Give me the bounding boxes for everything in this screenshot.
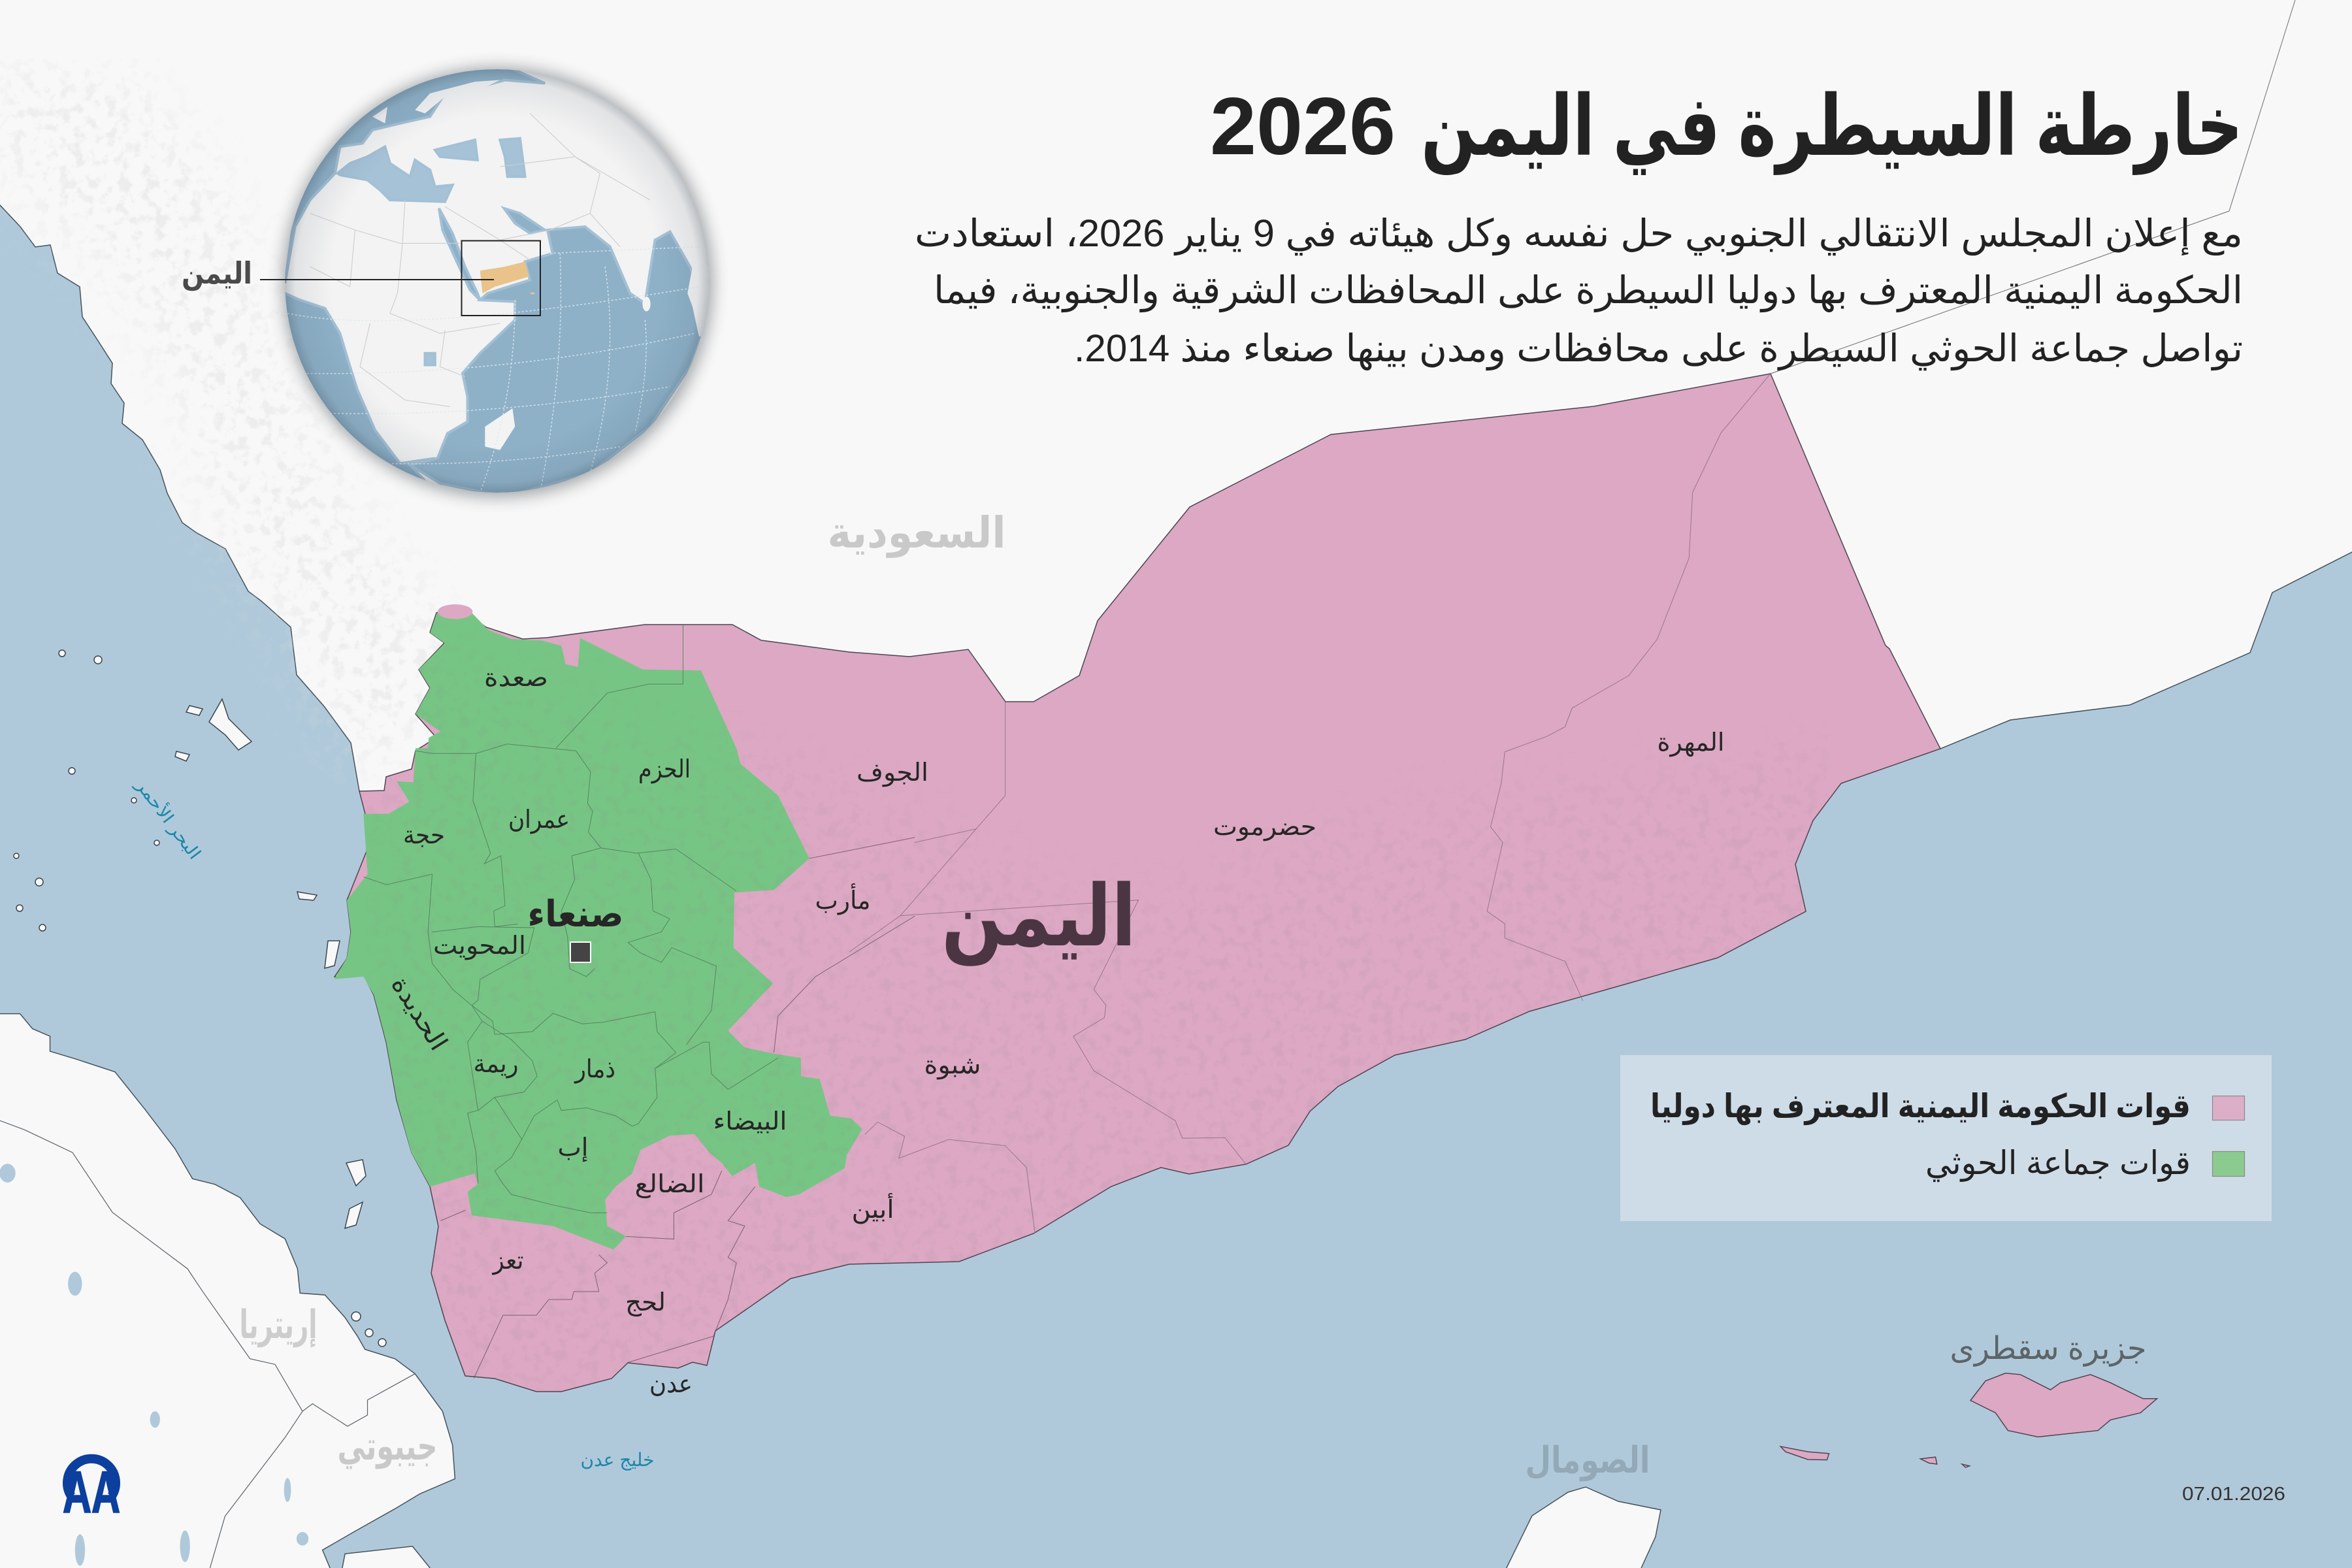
intro text: الحكومة اليمنية المعترف بها دوليا السيطرة على المحافظات الشرقية والجنوبية، فيما	[934, 269, 2243, 313]
province labels: عمران	[508, 806, 570, 834]
label: Yemen: اليمن	[182, 256, 252, 291]
land: Somalia coast	[1500, 1487, 1661, 1568]
province labels: الجوف	[857, 759, 928, 787]
province borders in the east	[849, 374, 1771, 1233]
borders: Eritrea, Ethiopia, Djibouti	[0, 1120, 415, 1568]
logo: Anadolu Agency: AA	[63, 1460, 120, 1526]
province labels: أبين	[852, 1193, 894, 1224]
province labels: صعدة	[484, 664, 548, 692]
locator box	[461, 240, 540, 316]
globe oceans	[280, 63, 709, 497]
province labels: حجة	[403, 822, 445, 849]
intro text	[915, 212, 2243, 371]
country labels: السعودية	[827, 508, 1006, 559]
land: Horn of Africa	[0, 1014, 455, 1568]
globe locator	[182, 63, 713, 497]
legend swatch: government	[2212, 1096, 2245, 1120]
province labels: ذمار	[574, 1056, 615, 1083]
legend	[1620, 1055, 2272, 1221]
capital: Sanaa: صنعاء	[528, 893, 623, 934]
province labels: الحديدة	[385, 972, 452, 1056]
province borders in the south-west	[440, 838, 915, 1379]
label: Socotra island: جزيرة سقطرى	[1950, 1331, 2147, 1367]
globe graticule	[287, 247, 700, 493]
globe land details	[372, 80, 710, 450]
Yemen: government controlled area	[335, 374, 1940, 1392]
pink enclave at the northern tip	[438, 604, 472, 619]
title: 2026	[1210, 82, 1396, 172]
Houthi controlled area	[335, 604, 915, 1379]
intro text: مع إعلان المجلس الانتقالي الجنوبي حل نفسه وكل هيئاته في 9 يناير 2026، استعادت	[915, 212, 2243, 256]
lakes	[0, 1164, 308, 1566]
legend panel	[1620, 1055, 2272, 1221]
province labels: لحج	[625, 1289, 666, 1317]
globe country borders	[310, 113, 650, 406]
country labels: إريتريا	[239, 1303, 318, 1348]
province labels: ريمة	[473, 1051, 519, 1078]
country labels: اليمن	[941, 868, 1136, 966]
capital: Sanaa	[528, 893, 623, 962]
terrain: western mountains	[0, 59, 470, 784]
globe shadow	[283, 67, 713, 497]
country labels: جيبوتي	[337, 1424, 438, 1469]
province labels: المهرة	[1657, 729, 1725, 757]
province labels: المحويت	[433, 932, 526, 960]
land: Arabian peninsula	[0, 0, 2352, 980]
Socotra and nearby islands	[1780, 1373, 2157, 1467]
date: 07.01.2026	[2182, 1484, 2285, 1505]
province labels: تعز	[492, 1247, 524, 1275]
leader line	[260, 279, 494, 280]
islands: Red Sea	[14, 650, 386, 1347]
province labels	[385, 664, 1725, 1398]
province labels: الحزم	[638, 756, 691, 784]
Yemen on globe	[480, 262, 529, 293]
country labels	[239, 508, 1650, 1482]
sea labels: البحر الأحمر	[131, 774, 206, 864]
line: Saudi-Oman border	[1771, 0, 2295, 374]
legend swatch: Houthi	[2212, 1151, 2245, 1176]
sea labels	[131, 774, 655, 1471]
logo: Anadolu Agency	[63, 1459, 120, 1526]
country labels: الصومال	[1525, 1439, 1650, 1482]
intro text: تواصل جماعة الحوثي السيطرة على محافظات ومدن بينها صنعاء منذ 2014.	[1074, 327, 2243, 371]
Yemen terrain texture	[366, 621, 1829, 1405]
globe shading	[285, 69, 708, 493]
province labels: مأرب	[815, 883, 870, 915]
province labels: الضالع	[635, 1171, 704, 1199]
province labels: حضرموت	[1213, 813, 1316, 841]
province borders in the Houthi area	[363, 625, 778, 1213]
province labels: إب	[558, 1134, 588, 1162]
legend text: Houthi: قوات جماعة الحوثي	[1925, 1145, 2191, 1182]
sea labels: خليج عدن	[580, 1450, 655, 1471]
province labels: البيضاء	[713, 1108, 787, 1135]
globe sphere	[280, 63, 710, 497]
province labels: عدن	[649, 1371, 693, 1398]
legend text: government: قوات الحكومة اليمنية المعترف بها دوليا	[1650, 1088, 2191, 1126]
province labels: شبوة	[924, 1052, 981, 1080]
